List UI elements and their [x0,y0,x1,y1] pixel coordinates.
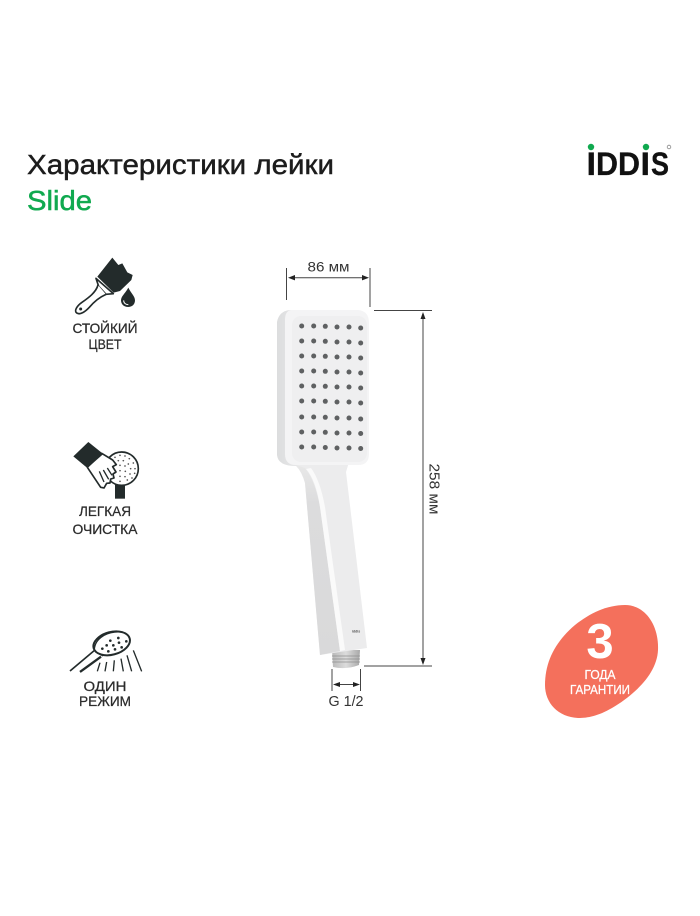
dimension: width 86 mm: 86 мм [308,258,350,274]
logo: iddis [586,144,671,182]
title: Slide [27,185,92,216]
label: legkaya ochistka: ОЧИСТКА [72,521,138,537]
label: stoikii tsvet: ЦВЕТ [88,336,122,352]
title [27,149,334,216]
title: Характеристики лейки [27,149,334,180]
head face [285,310,369,465]
dimension: thread G 1/2 [328,669,364,710]
label: odin rezhim [79,678,131,709]
dimension: width 86 mm [286,258,370,307]
warranty badge: ГАРАНТИИ [570,683,630,697]
logo: iddis: I [640,146,650,182]
logo: iddis: S [651,146,669,182]
label: stoikii tsvet: СТОЙКИЙ [72,319,138,336]
warranty badge: 3 [586,615,614,669]
warranty badge [545,605,658,718]
logo: iddis: D [596,146,618,182]
connector nut [332,650,360,668]
spray nozzles [299,324,363,451]
handle [296,462,367,655]
dimension: height 258 mm: 258 мм [426,464,442,514]
label: odin rezhim: РЕЖИМ [79,693,131,709]
shower handset [277,310,369,668]
icon: paint brush with drop [76,258,135,314]
label: stoikii tsvet [72,319,138,352]
warranty badge: ГОДА [584,668,616,682]
handle logo: iddis [352,630,360,634]
icon: shower spray [70,628,142,672]
logo: iddis: I [586,146,596,182]
logo: iddis: D [618,146,640,182]
label: legkaya ochistka [72,503,138,537]
dimension: thread G 1/2: G 1/2 [328,693,364,710]
label: legkaya ochistka: ЛЕГКАЯ [79,503,131,519]
dimension: height 258 mm [364,310,442,666]
label: odin rezhim: ОДИН [84,678,126,694]
icon: hand cleaning shower head [73,442,138,499]
head side [277,310,302,466]
